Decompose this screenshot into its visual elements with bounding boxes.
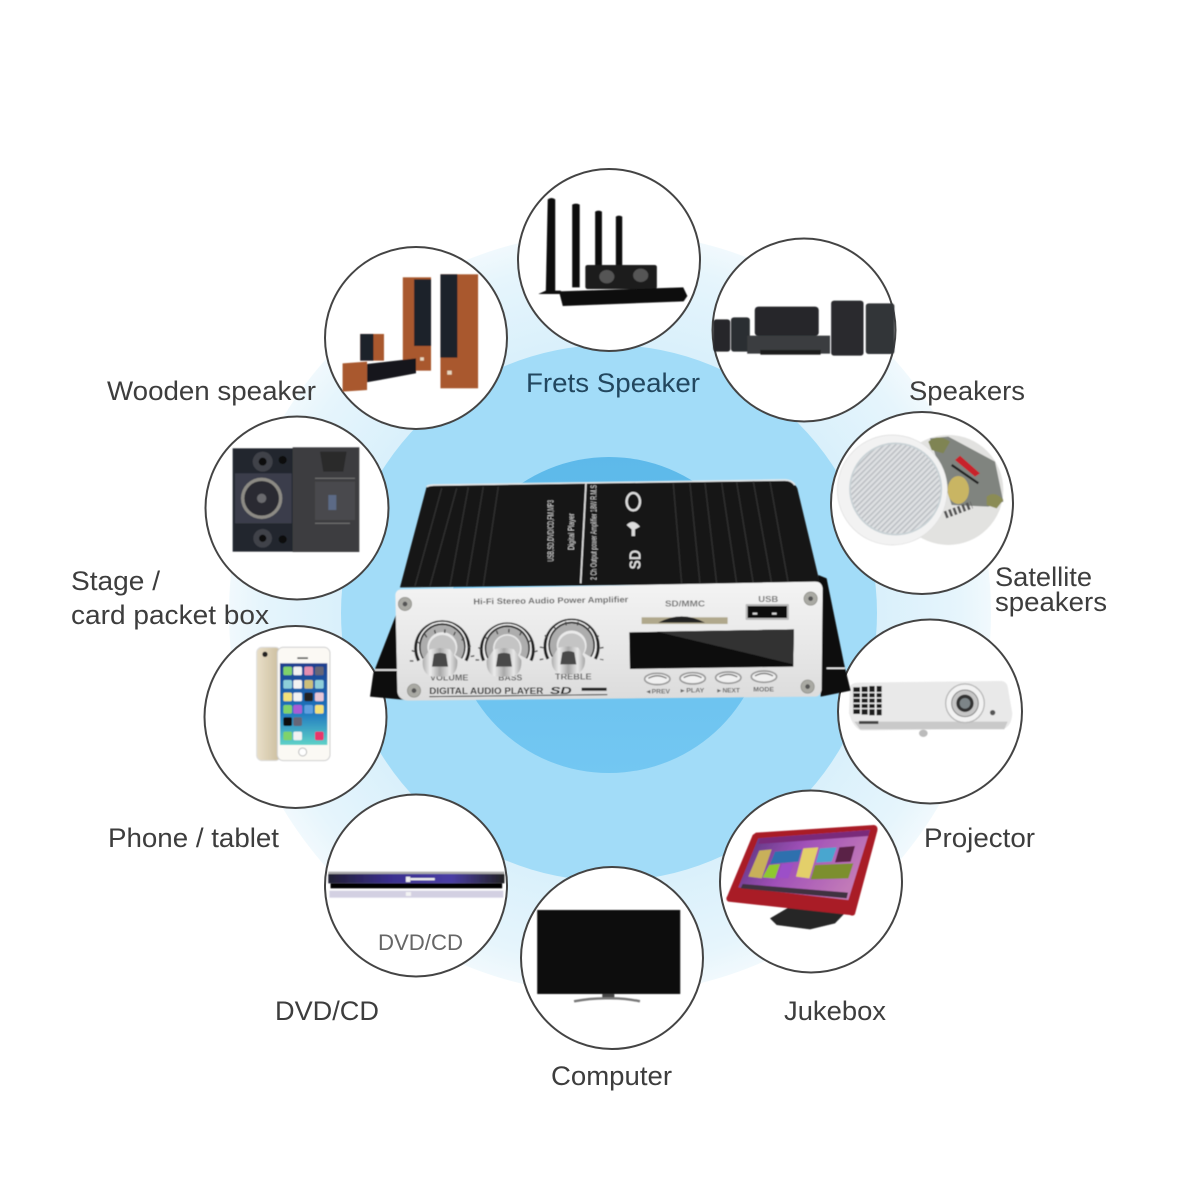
- label: dvd cd: DVD/CD: [275, 996, 379, 1026]
- knob labels: [430, 672, 592, 683]
- label: satellite speakers: speakers: [995, 587, 1107, 617]
- label: jukebox: Jukebox: [784, 996, 886, 1026]
- top cover printing: [546, 485, 645, 580]
- icon: stage speaker: [233, 447, 359, 552]
- sd slot: [642, 600, 728, 624]
- device labels: [71, 368, 1107, 1091]
- circle: wooden speaker: [325, 247, 507, 429]
- circle: satellite speakers: [831, 412, 1013, 594]
- top cover printing: Digital Player: [567, 513, 576, 550]
- circle: projector: [838, 620, 1022, 804]
- screws: [398, 592, 817, 697]
- label: stage card packet box: card packet box: [71, 600, 270, 630]
- knob labels: VOLUME: [430, 674, 469, 683]
- circle: dvd player: [325, 794, 507, 976]
- digital audio player legend: SD: [550, 686, 572, 697]
- volume knob: [412, 622, 473, 677]
- label: satellite speakers: Satellite: [995, 562, 1092, 592]
- icon: dvd player: [328, 872, 504, 898]
- concentric blue background circles: [229, 232, 991, 994]
- treble knob: [541, 620, 602, 674]
- control buttons: MODE: [753, 688, 774, 694]
- label: computer: Computer: [551, 1061, 672, 1091]
- usb port: USB: [758, 595, 779, 604]
- display: [629, 629, 794, 669]
- panel heading: Hi-Fi Stereo Audio Power Amplifier: [473, 594, 629, 606]
- icon: projector: [849, 681, 1012, 737]
- circle: stage speaker: [206, 416, 388, 600]
- knob labels: BASS: [498, 674, 523, 683]
- label: phone tablet: Phone / tablet: [108, 823, 279, 853]
- knob labels: TREBLE: [555, 672, 592, 681]
- amplifier front panel: [395, 582, 823, 701]
- circle: computer: [521, 867, 703, 1049]
- icon: wooden speakers: [343, 274, 478, 392]
- label: frets speaker: Frets Speaker: [526, 368, 700, 398]
- amplifier top cover: [400, 480, 820, 587]
- circle: phone and tablet: [204, 626, 386, 808]
- label: speakers: Speakers: [909, 376, 1025, 406]
- label: stage card packet box: Stage /: [71, 566, 161, 596]
- digital audio player legend: DIGITAL AUDIO PLAYER: [429, 686, 544, 696]
- control buttons: ◄PREV: [645, 689, 670, 695]
- top cover printing: 2 Ch Output power Amplifier 18W R.M.S: [590, 485, 599, 580]
- top cover printing: SD: [628, 550, 645, 569]
- label: projector: Projector: [924, 823, 1035, 853]
- circle: frets speaker: [518, 169, 700, 351]
- label inside dvd circle: DVD/CD: [378, 930, 463, 955]
- control buttons: [645, 671, 777, 695]
- icon: ceiling speaker: [837, 435, 1003, 545]
- control buttons: ►PLAY: [679, 689, 704, 695]
- top cover printing: USB,SD,DVD/CD,FM,MP3: [546, 500, 555, 562]
- amplifier: [370, 480, 851, 701]
- label: wooden speaker: Wooden speaker: [107, 376, 316, 406]
- bass knob: [477, 624, 537, 677]
- icon: jukebox touchscreen: [726, 825, 878, 929]
- usb port: [746, 595, 789, 620]
- amplifier feet: [370, 575, 851, 700]
- control buttons: ►NEXT: [716, 689, 740, 695]
- icon: television monitor: [537, 910, 680, 1001]
- icon: home theater speakers: [713, 301, 894, 356]
- label: stage card packet box: [71, 566, 270, 630]
- circle: speakers: [712, 238, 896, 422]
- icon: smartphones: [257, 647, 330, 761]
- label: satellite speakers: [995, 562, 1107, 617]
- digital audio player legend: [429, 686, 607, 697]
- sd slot: SD/MMC: [665, 600, 705, 609]
- circle: jukebox: [720, 790, 902, 972]
- icon: frets speaker set: [538, 198, 687, 306]
